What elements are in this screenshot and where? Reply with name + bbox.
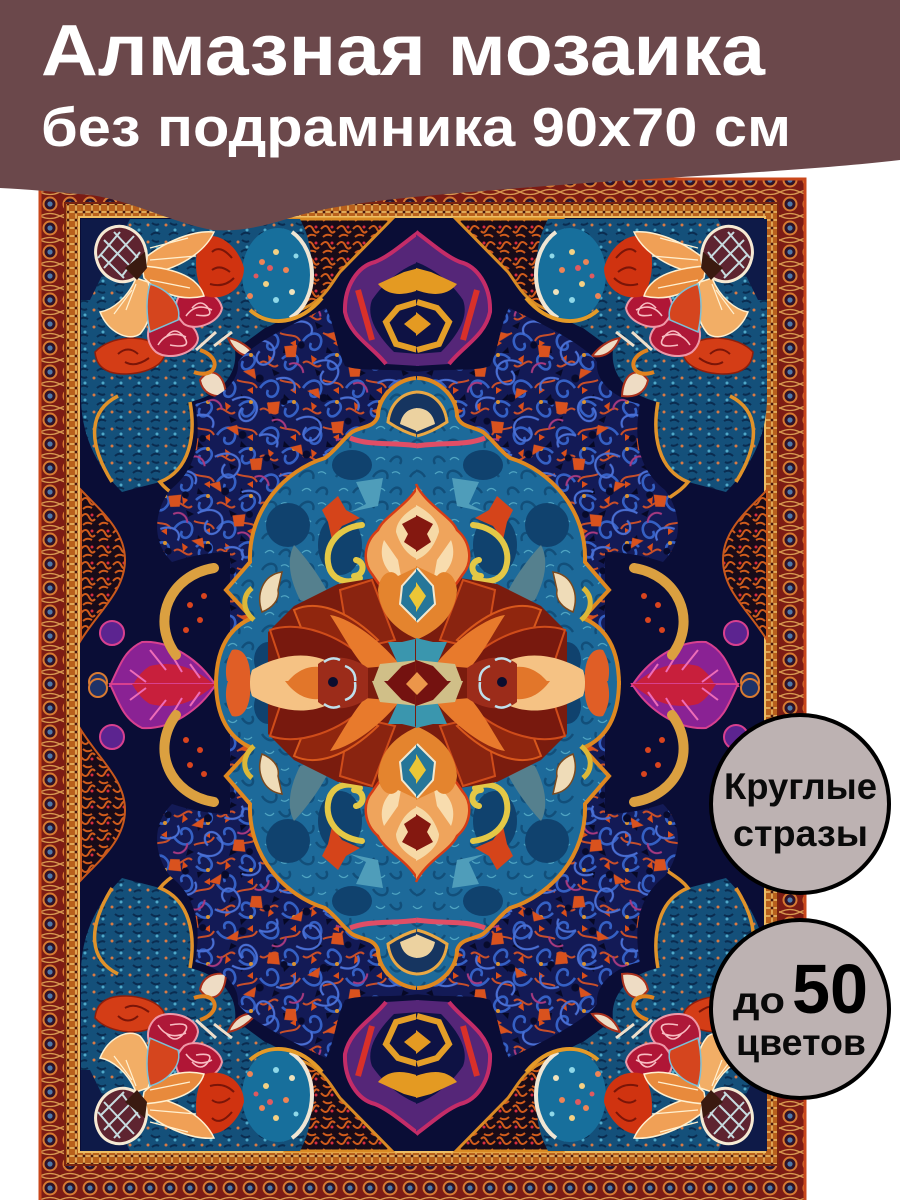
badge: round rhinestones xyxy=(711,715,889,893)
side filigree xyxy=(81,490,125,640)
side knot motif xyxy=(318,658,368,689)
top-left central quadrant xyxy=(157,232,420,689)
header banner xyxy=(0,0,900,230)
carpet outer chain border xyxy=(39,178,806,1200)
small violet blossoms xyxy=(89,621,124,691)
orange lotus xyxy=(378,566,419,640)
yellow crescent xyxy=(328,525,363,581)
top-left corner quadrant xyxy=(81,219,392,691)
peach rays xyxy=(100,232,214,337)
corner filigree spandrel xyxy=(285,219,392,310)
badge: round rhinestones: Круглые xyxy=(724,766,877,807)
lattice blossom xyxy=(88,219,154,289)
medallion body xyxy=(216,378,419,685)
center tile xyxy=(372,660,419,685)
teal leaves xyxy=(350,478,383,512)
brown-red petals xyxy=(270,580,400,676)
white scroll leaves xyxy=(194,332,256,396)
top-right corner quadrant xyxy=(456,219,767,691)
red flower sprig xyxy=(322,496,360,540)
badge: up to 50 colours xyxy=(711,920,889,1098)
center star xyxy=(384,660,419,685)
badge: round rhinestones: стразы xyxy=(733,813,868,854)
blue and orange lace field xyxy=(157,308,419,684)
navy corner speckle xyxy=(81,219,130,300)
teal cross arm xyxy=(388,638,419,668)
carpet gold frame xyxy=(65,203,778,1165)
central ornaments: field, arches and medallion xyxy=(157,232,678,1134)
carpet outer red edge xyxy=(40,179,805,1200)
medallion gold outline xyxy=(216,378,418,685)
badge: up to 50 colours: цветов xyxy=(736,1022,866,1063)
lace field overlay xyxy=(157,308,419,684)
crescent red dots xyxy=(183,593,207,633)
grey leaves xyxy=(290,545,334,610)
title line 2: без подрамника 90х70 см xyxy=(41,96,791,158)
bottom-left corner quadrant xyxy=(81,679,392,1151)
bottom-right corner quadrant xyxy=(456,679,767,1151)
outer ornaments: corner quadrants xyxy=(81,219,767,1151)
side panel gold outline xyxy=(95,396,192,510)
cream scroll xyxy=(260,572,282,612)
badge: up to 50 colours: 50 xyxy=(792,950,868,1028)
top-right central quadrant xyxy=(415,232,678,689)
bottom-left central quadrant xyxy=(157,677,420,1134)
carpet navy ground xyxy=(79,217,765,1152)
medallion arch finial xyxy=(350,392,419,446)
blue roundel xyxy=(242,228,322,321)
bottom-right central quadrant xyxy=(415,677,678,1134)
red and crimson roses xyxy=(95,236,244,374)
top peach petal xyxy=(366,484,419,624)
badge: up to 50 colours: до xyxy=(733,980,785,1021)
blue spandrel xyxy=(81,219,311,492)
purple arch motif xyxy=(345,232,419,366)
yellow side crescent xyxy=(245,588,254,620)
magenta side flower xyxy=(110,642,216,686)
panel: carpet artwork xyxy=(39,178,806,1200)
center jewel xyxy=(406,672,428,695)
title xyxy=(41,11,791,158)
medallion dark lobes xyxy=(254,450,372,678)
title line 1: Алмазная мозаика xyxy=(41,11,766,91)
gold crescent xyxy=(164,568,214,655)
brown-red petal mass xyxy=(268,578,420,685)
orange rosette xyxy=(226,649,250,685)
cream side petal xyxy=(250,655,325,685)
